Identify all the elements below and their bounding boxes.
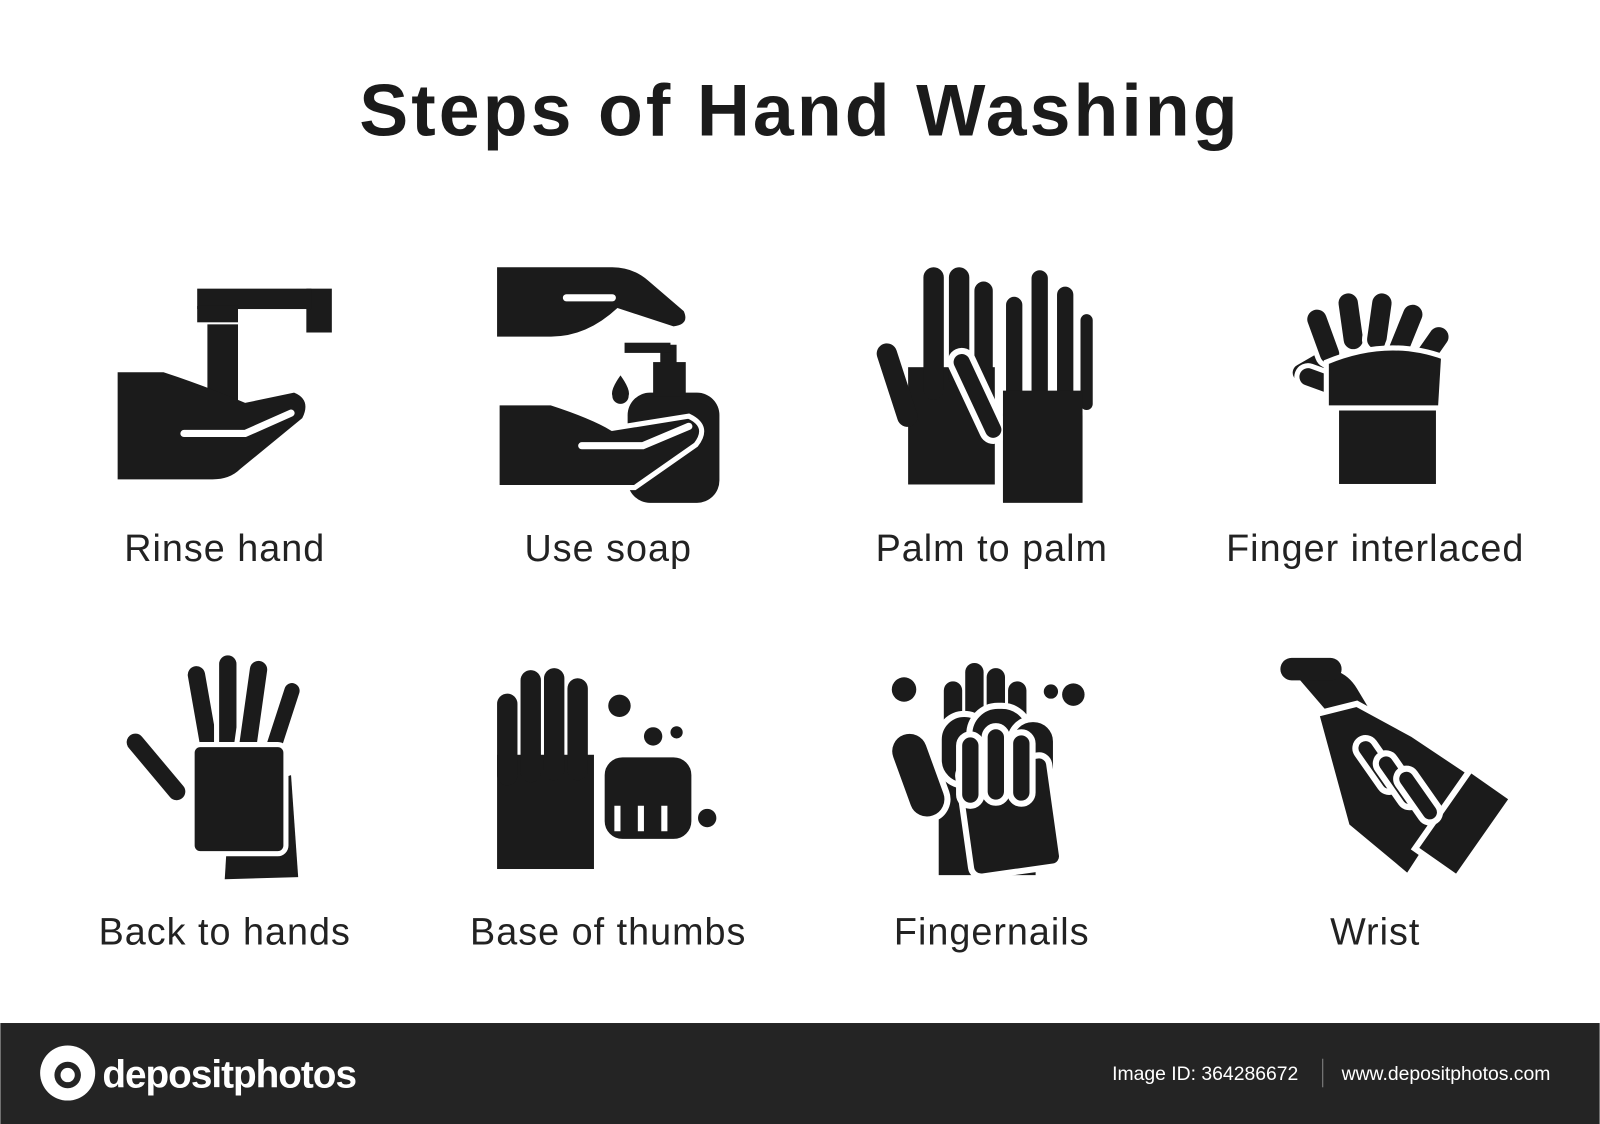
footer logo text: depositphotos: [102, 1053, 356, 1096]
label: use soap: Use soap: [524, 527, 692, 569]
icon: finger interlaced: [1286, 289, 1456, 487]
label: wrist: Wrist: [1330, 910, 1420, 952]
icon: use soap: [497, 267, 719, 503]
icon: back to hands: [120, 653, 305, 879]
icon: camera logo: [40, 1045, 95, 1101]
label: fingernails: Fingernails: [894, 910, 1090, 952]
icon: wrist: [1280, 658, 1512, 878]
footer image id: Image ID: 364286672: [1112, 1063, 1298, 1085]
footer url: www.depositphotos.com: [1341, 1063, 1550, 1085]
label: palm to palm: Palm to palm: [876, 527, 1108, 569]
icon: rinse hand: [118, 289, 332, 479]
icon: fingernails: [883, 663, 1085, 878]
icon: base of thumbs: [497, 668, 716, 869]
footer bar: [0, 1023, 1600, 1124]
label: back to hands: Back to hands: [99, 910, 351, 952]
label: rinse hand: Rinse hand: [124, 527, 325, 569]
label: finger interlaced: Finger interlaced: [1226, 527, 1524, 569]
label: base of thumbs: Base of thumbs: [470, 910, 746, 952]
title: Steps of Hand Washing: [359, 70, 1241, 152]
icon: palm to palm: [874, 267, 1096, 505]
